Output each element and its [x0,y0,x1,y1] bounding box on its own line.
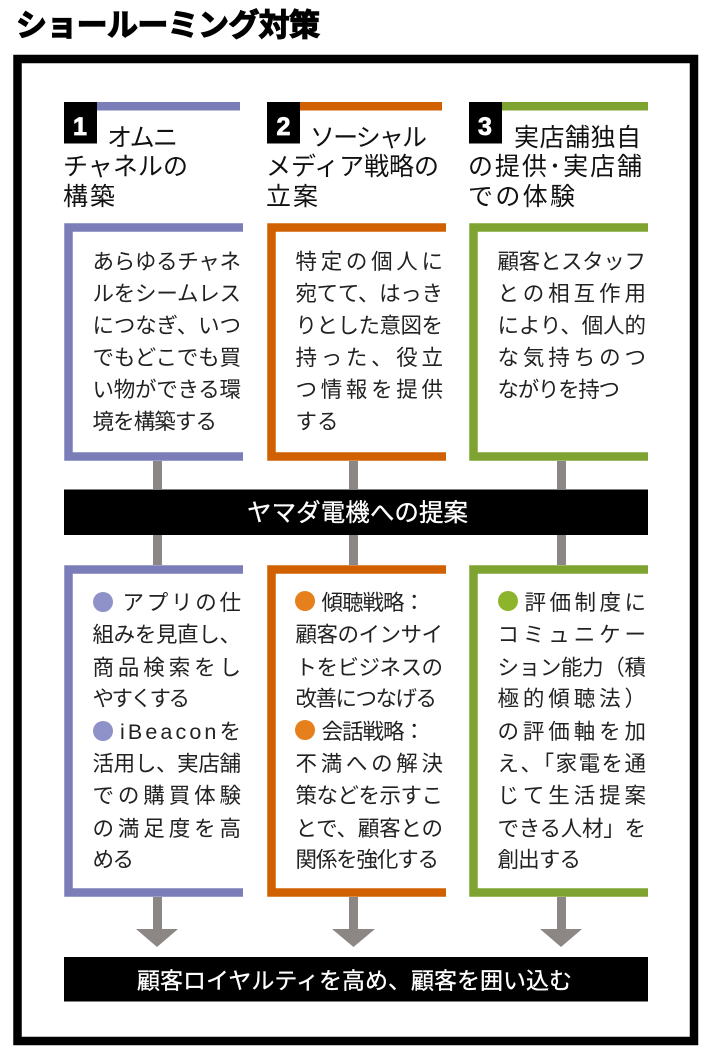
panel: column 1 upper: ルをシームレス [92,282,241,306]
panel: column 1 lower: 組みを見直し、 [92,623,241,647]
column 2 heading: 立案 [266,183,318,211]
panel: column 1 upper: につなぎ、いつ [92,314,241,338]
panel: column 1 lower: の満足度を高 [92,817,241,841]
panel: column 1 upper: でもどこでも買 [92,346,241,370]
column 1 heading: 構築 [63,183,115,211]
panel: column 3 upper: ながりを持つ [498,378,620,402]
panel: column 2 lower: 顧客のインサイ [296,623,443,647]
panel: column 2 lower: 改善につなげる [296,687,437,711]
column 2 heading: メディア戦略の [266,153,439,181]
panel: column 3 lower: コミュニケー [498,623,646,647]
column 1 heading [63,102,240,211]
panel: column 2 upper: りとした意図を [296,314,443,338]
panel: column 3 lower: 創出する [498,848,581,872]
panel: column 1 lower: での購買体験 [92,784,241,808]
banner: proposal to Yamada Denki: ヤマダ電機への提案 [247,499,468,527]
panel: column 2 lower: 会話戦略： [322,720,425,744]
panel: column 3 upper: との相互作用 [498,282,646,306]
panel: column 2 upper: 宛てて、はっき [296,282,443,306]
panel: column 2 lower [272,570,446,892]
panel: column 2 lower: 関係を強化する [296,848,439,872]
panel: column 3 lower: できる人材」を [498,817,646,841]
column 1 heading: オムニ [107,124,178,152]
panel: column 1 upper: 境を構築する [92,410,217,434]
panel: column 3 lower: の評価軸を加 [498,720,646,744]
panel: column 3 upper [474,228,648,456]
banner: customer loyalty [64,957,648,1002]
banner: customer loyalty: 顧客ロイヤルティを高め、顧客を囲い込む [137,968,572,994]
panel: column 3 lower: 極的傾聴法） [498,687,646,711]
panel: column 1 lower: 商品検索をし [92,656,241,680]
column 2 heading [266,102,442,211]
panel: column 1 lower: 活用し、実店舗 [92,752,241,776]
panel: column 1 upper: あらゆるチャネ [92,250,241,274]
panel: column 1 upper: い物ができる環 [92,378,241,402]
column 3 heading [468,102,648,211]
column 3 heading: での体験 [468,183,575,211]
panel: column 2 lower: 不満への解決 [296,752,443,776]
panel: column 3 lower: 評価制度に [524,591,646,615]
panel: column 2 lower: とで、顧客との [296,817,443,841]
panel: column 3 lower: え、「家電を通 [498,752,646,776]
panel: column 3 upper: により、個人的 [498,314,646,338]
panel: column 3 lower [474,570,648,892]
panel: column 2 upper: つ情報を提供 [296,378,443,402]
panel: column 1 lower [68,570,243,892]
connectors and arrows [136,461,582,947]
panel: column 2 upper: 持った、役立 [296,346,443,370]
panel: column 2 lower: トをビジネスの [296,656,443,680]
panel: column 2 upper: 特定の個人に [296,250,443,274]
panel: column 1 upper [68,228,243,456]
panel: column 3 upper: 顧客とスタッフ [498,250,646,274]
panel: column 2 lower: 策などを示すこ [296,784,443,808]
panel: column 2 upper [272,228,446,456]
panel: column 2 upper: する [296,410,338,434]
banner: proposal to Yamada Denki [64,490,648,535]
column 3 heading: 3 [478,113,492,141]
column 1 heading: 1 [73,113,87,141]
panel: column 3 lower: ション能力（積 [498,656,646,680]
panel: column 1 lower: やすくする [92,687,190,711]
panel: column 2 lower: 傾聴戦略： [322,591,425,615]
panel: column 1 lower: iBeaconを [120,720,241,744]
column 1 heading: チャネルの [63,153,188,181]
column 3 heading: の提供･実店舗 [468,153,642,181]
column 3 heading: 実店舗独自 [514,124,641,152]
column 2 heading: ソーシャル [310,124,427,152]
panel: column 1 lower: アプリの仕 [122,591,241,615]
title: ショールーミング対策 [16,8,320,43]
panel: column 3 lower: じて生活提案 [498,784,646,808]
column 2 heading: 2 [277,113,290,141]
panel: column 1 lower: める [92,848,134,872]
panel: column 3 upper: な気持ちのつ [498,346,646,370]
